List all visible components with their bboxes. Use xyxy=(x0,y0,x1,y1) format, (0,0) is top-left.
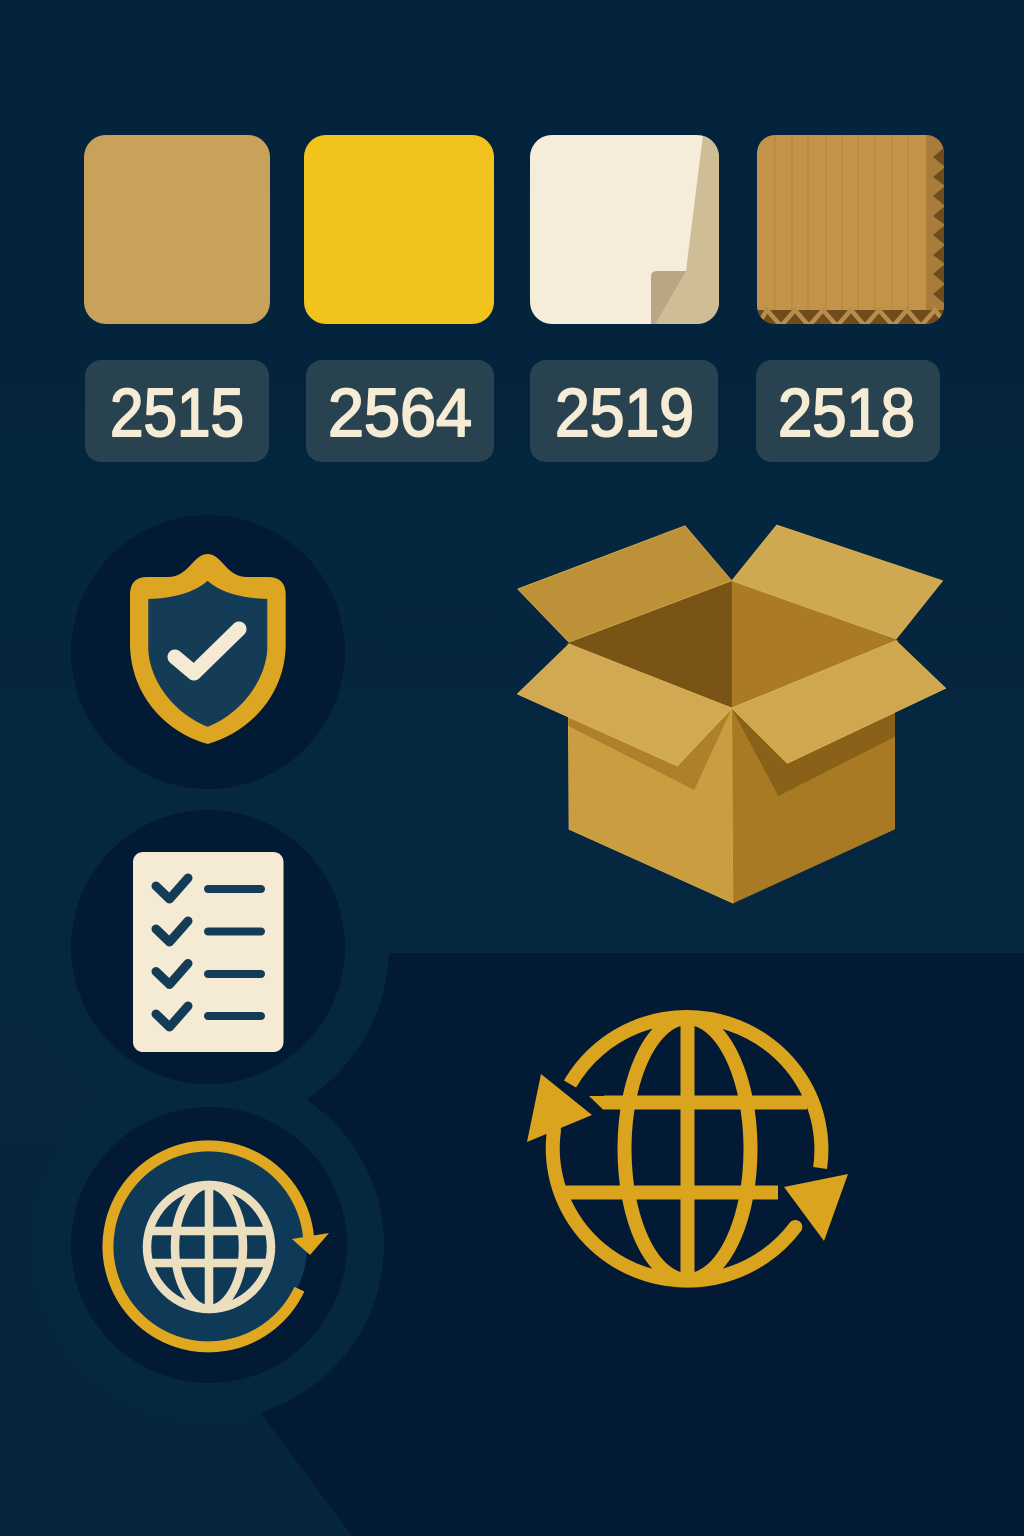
label 2518 xyxy=(756,360,940,462)
swatch: corrugated cardboard xyxy=(757,135,946,326)
swatch: cream paper with curled corner xyxy=(530,135,719,324)
label 2515 xyxy=(85,360,269,462)
illustration: large globe with circular arrows xyxy=(527,1017,848,1281)
label 2519 xyxy=(530,360,718,462)
label 2515: 2515 xyxy=(110,375,244,451)
label 2519: 2519 xyxy=(555,375,694,451)
label 2564 xyxy=(306,360,494,462)
dark lower-right panel xyxy=(27,766,1024,1536)
icon: checklist document xyxy=(71,810,345,1084)
label 2564: 2564 xyxy=(328,375,472,451)
icon: small globe with circular arrow xyxy=(71,1107,347,1383)
swatch: kraft xyxy=(84,135,270,324)
swatch: yellow xyxy=(304,135,494,324)
label 2518: 2518 xyxy=(778,375,915,451)
icon: shield with check xyxy=(71,515,345,789)
illustration: open cardboard box xyxy=(517,525,946,903)
